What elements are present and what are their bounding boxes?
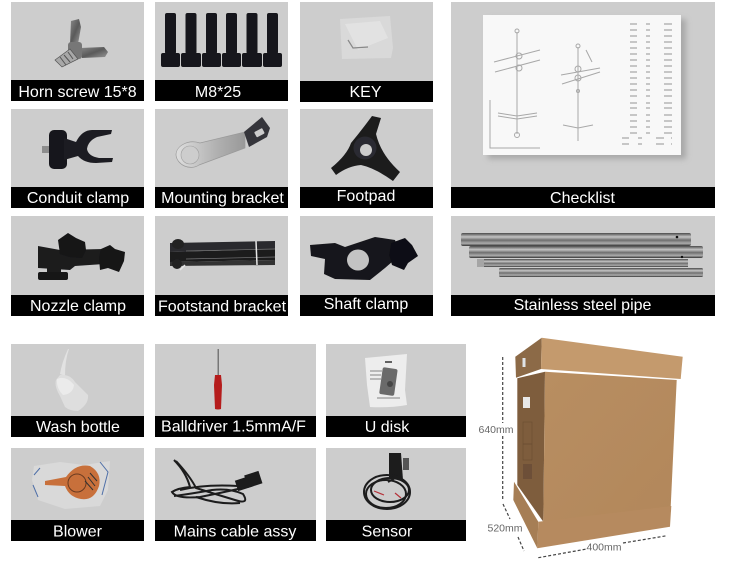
panel: blower [11,448,144,541]
label text: Mains cable assy [174,524,296,540]
label bar [300,295,433,316]
label bar [326,520,466,541]
label bar [155,416,316,437]
icon: wash bottle [56,349,88,411]
label text: Mounting bracket [161,190,284,207]
label text: KEY [349,84,382,101]
dimension: depth [487,504,524,551]
label bar [155,80,288,101]
panel: wash bottle [11,344,144,437]
icon: conduit clamp [42,130,113,169]
dimension: depth: 520mm [487,522,523,534]
label bar [11,80,144,101]
panel: balldriver [155,344,316,437]
panel: horn screw [11,2,144,101]
label text: Footpad [337,188,395,205]
icon: checklist sheet with assembly drawing [483,15,686,159]
label text: Sensor [362,524,413,540]
icon: three-arm footpad [331,116,400,181]
label bar [155,520,316,541]
icon: red screwdriver [214,349,222,410]
label bar [155,187,288,208]
icon: cardboard box with dimensions [478,338,683,558]
label text: Stainless steel pipe [514,297,652,314]
panel: mounting bracket [155,109,288,208]
icon: four steel pipes [461,233,703,277]
label bar [451,295,715,316]
label text: Shaft clamp [324,296,408,313]
panel: footpad [300,109,433,208]
label text: Conduit clamp [27,190,129,207]
panel: shaft clamp [300,216,433,316]
box body [513,338,683,548]
label bar [300,81,433,102]
label text: Wash bottle [36,419,120,436]
label bar [11,295,144,316]
label bar [300,187,433,208]
icon: nozzle clamp [38,233,125,280]
label bar [155,295,288,316]
icon: six socket bolts [161,13,282,67]
label bar [11,416,144,437]
panel: stainless steel pipe [451,216,715,316]
label bar [11,187,144,208]
icon: mounting bracket [176,117,270,167]
icon: orange air blower in bag [32,461,110,509]
panel: footstand bracket [155,216,288,316]
label text: Balldriver 1.5mmA/F [161,418,306,436]
panel: nozzle clamp [11,216,144,316]
icon: sensor with coiled cable [364,453,410,509]
icon: shaft clamp [310,237,418,280]
panel: sensor [326,448,466,541]
icon: USB drive in bag [365,354,407,407]
dimension: width [538,536,667,558]
label text: Blower [53,524,103,540]
panel: conduit clamp [11,109,144,208]
dimension: height: 640mm [478,424,514,436]
dimension: width: 400mm [586,542,622,554]
icon: hex key in plastic bag [340,16,393,59]
panel: U disk [326,344,466,437]
icon: bundled footstand bracket [170,239,275,270]
label text: Nozzle clamp [30,298,126,315]
label bar [11,520,144,541]
panel: key [300,2,433,102]
label text: Checklist [550,190,616,207]
panel: checklist [451,2,715,208]
label bar [451,187,715,208]
panel: mains cable [155,448,316,541]
panel: M8*25 [155,2,288,101]
label bar [326,416,466,437]
label text: M8*25 [195,84,241,101]
icon: wing screw [55,19,108,67]
label text: Footstand bracket [158,298,287,316]
icon: coiled mains cable [172,460,261,503]
label text: U disk [365,419,410,436]
label text: Horn screw 15*8 [18,84,137,101]
